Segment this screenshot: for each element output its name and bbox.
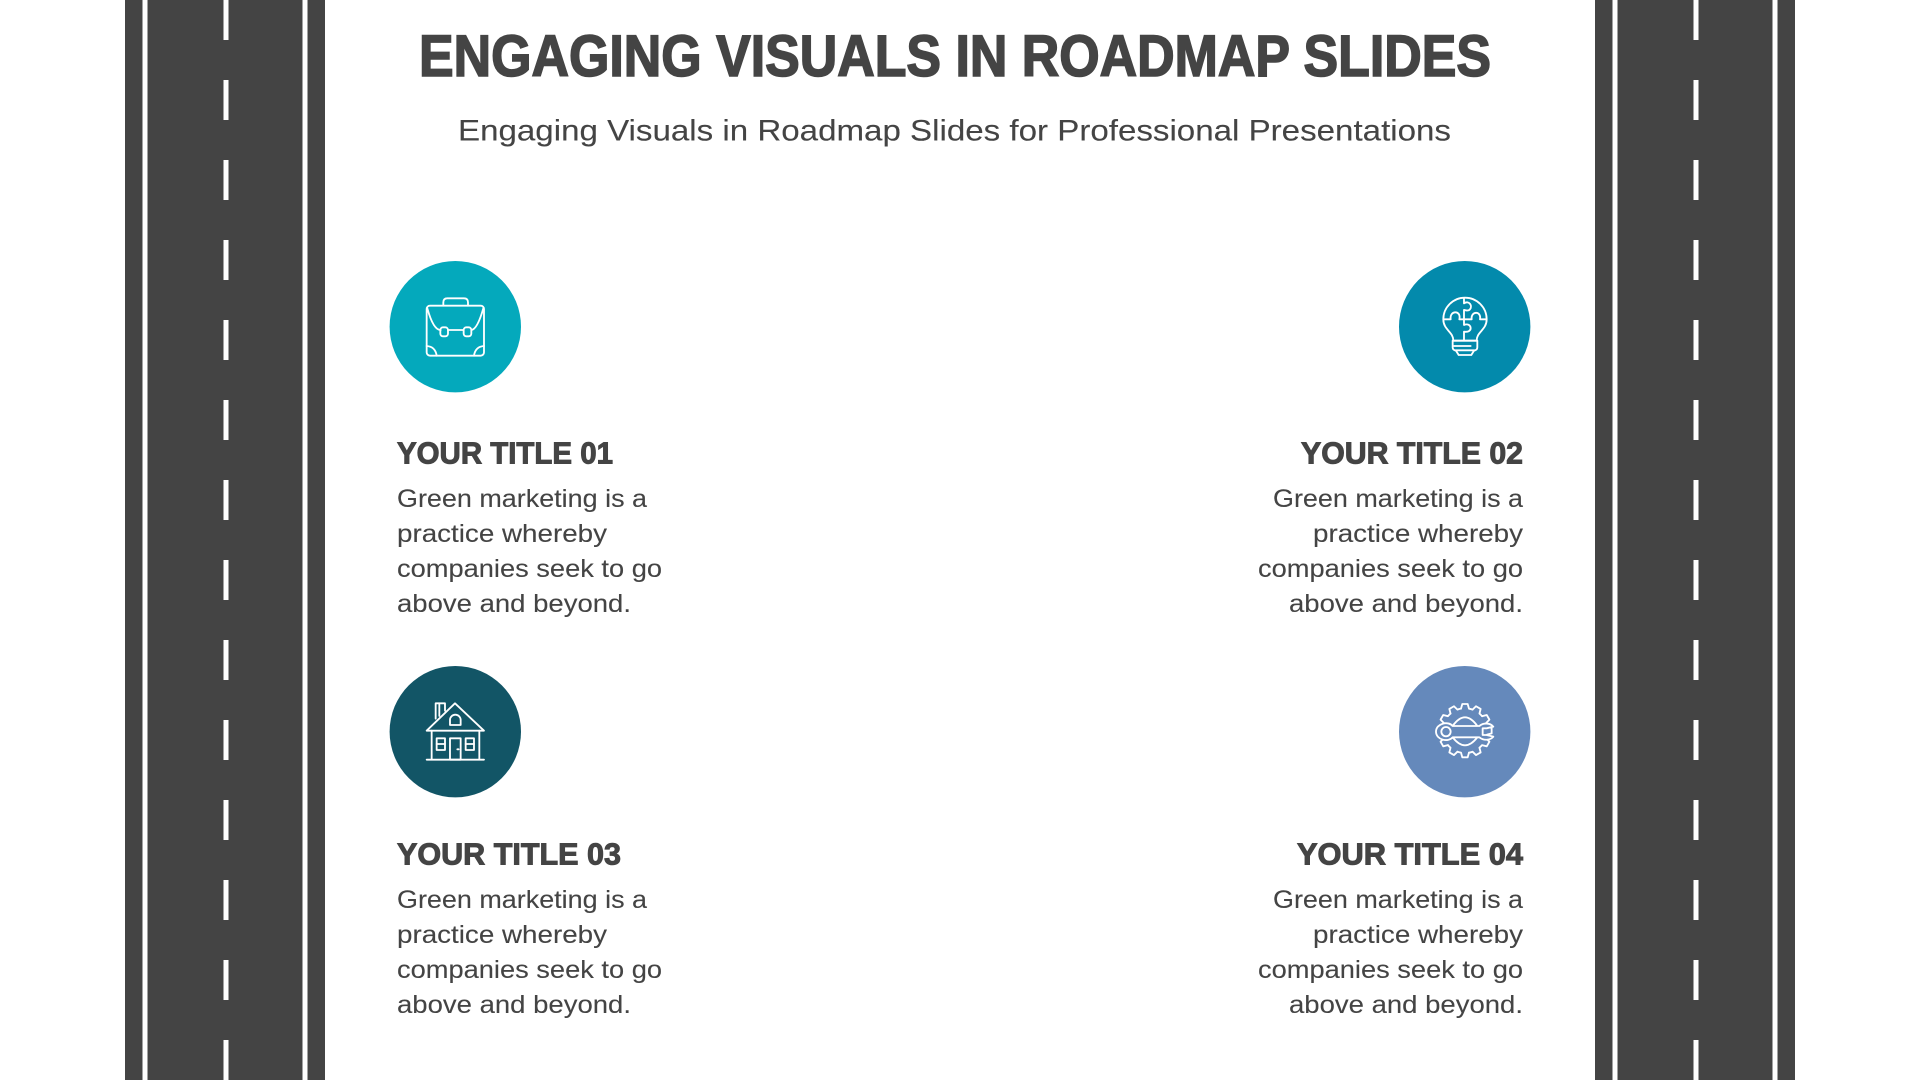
body 04: above and beyond. [1289,991,1523,1019]
text block: title 03 [397,836,662,1019]
body 03 [397,886,662,1019]
heading 02: YOUR TITLE 02 [1301,436,1523,470]
body 03: practice whereby [397,921,608,949]
title: ENGAGING VISUALS IN ROADMAP SLIDES [419,24,1491,89]
body 03: Green marketing is a [397,886,647,914]
icon: briefcase [390,261,521,392]
right road [1595,0,1795,1080]
body 01: Green marketing is a [397,485,647,513]
body 01: above and beyond. [397,590,631,618]
body 04: companies seek to go [1258,956,1523,984]
body 02: companies seek to go [1258,555,1523,583]
heading 01: YOUR TITLE 01 [397,436,613,470]
body 01 [397,485,662,618]
text block: title 02 [1258,436,1524,618]
body 02: Green marketing is a [1273,485,1523,513]
body 02: practice whereby [1313,520,1524,548]
text block: title 04 [1258,836,1524,1019]
icon: house [390,666,521,797]
heading 03: YOUR TITLE 03 [397,836,621,872]
body 04: practice whereby [1313,921,1524,949]
left road [125,0,325,1080]
body 01: practice whereby [397,520,608,548]
text block: title 01 [397,436,662,618]
body 03: companies seek to go [397,956,662,984]
body 03: above and beyond. [397,991,631,1019]
body 02: above and beyond. [1289,590,1523,618]
icon: gear and wrench [1399,666,1530,797]
body 04 [1258,886,1524,1019]
heading 04: YOUR TITLE 04 [1297,836,1524,872]
body 01: companies seek to go [397,555,662,583]
subtitle: Engaging Visuals in Roadmap Slides for Professional Presentations [458,114,1451,148]
body 04: Green marketing is a [1273,886,1523,914]
icon: puzzle light bulb [1399,261,1530,392]
body 02 [1258,485,1524,618]
